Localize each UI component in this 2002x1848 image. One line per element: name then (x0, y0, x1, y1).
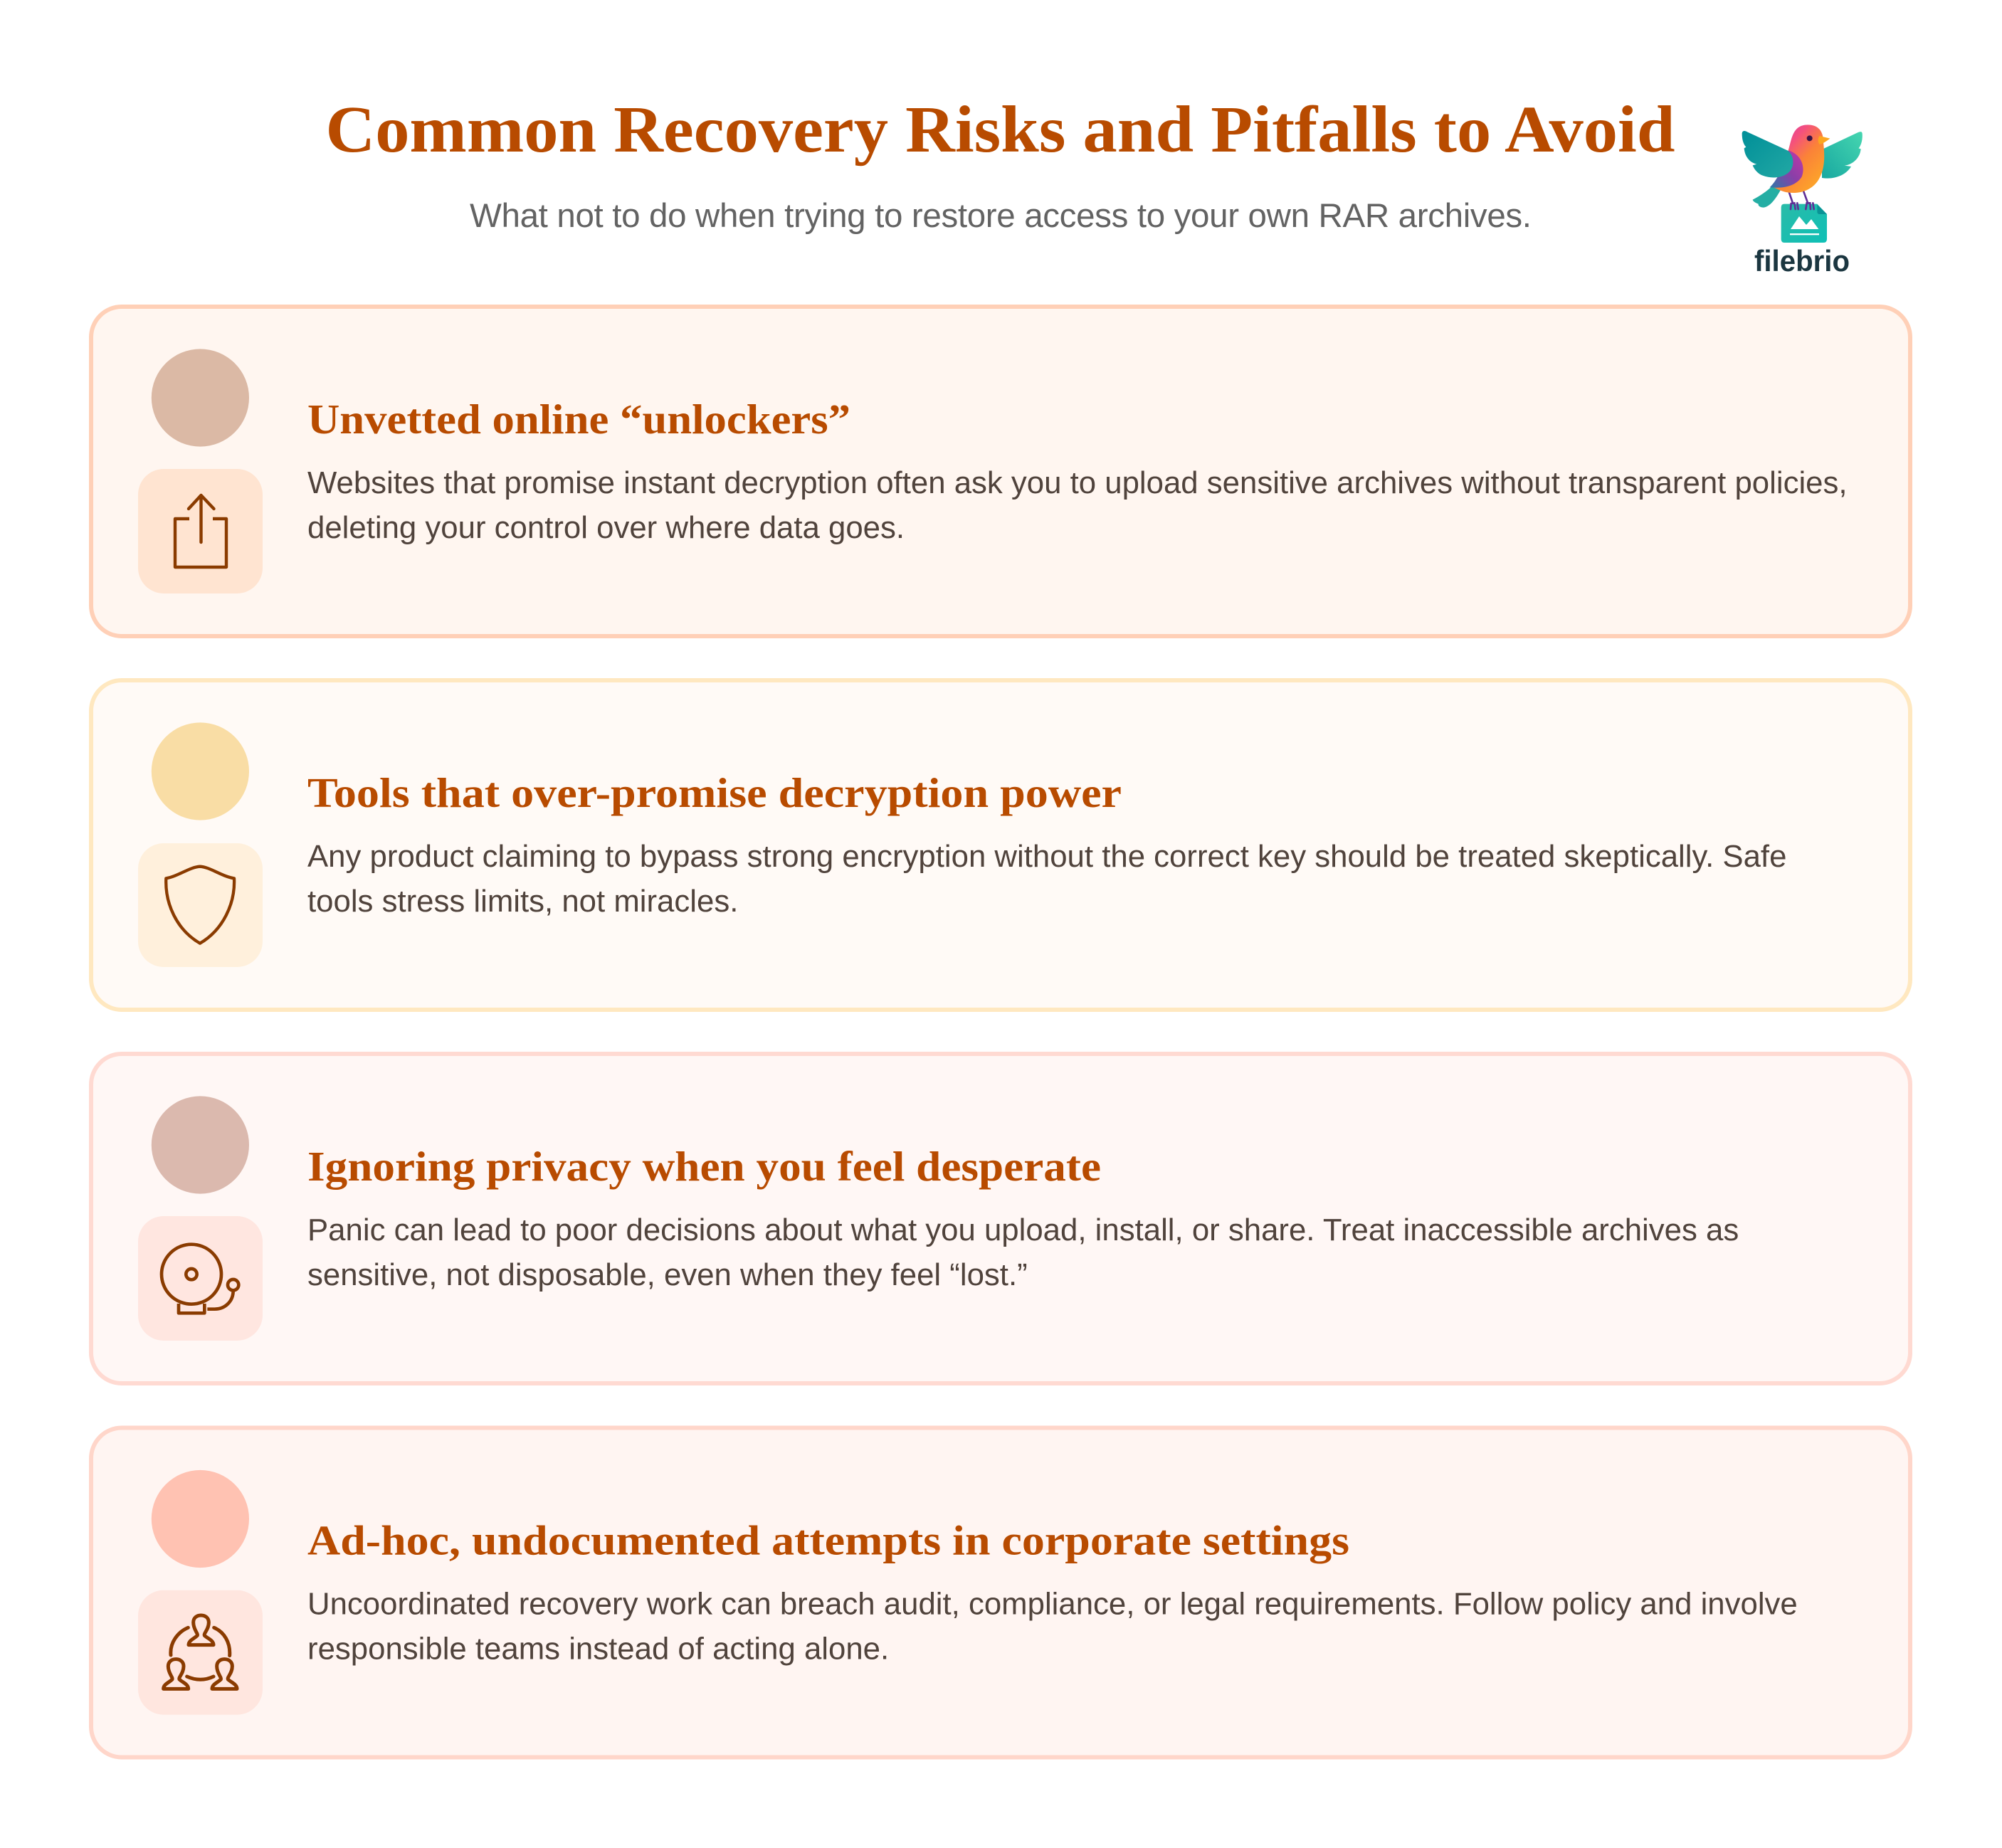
panel: tools that over-promise (91, 680, 1910, 1010)
number circle (152, 349, 249, 447)
body (1774, 125, 1824, 193)
number circle (152, 1470, 249, 1568)
icon tile (138, 1216, 263, 1341)
heading: Ignoring privacy when you feel desperate (307, 1143, 1101, 1190)
body text: responsible teams instead of acting alone. (307, 1631, 889, 1667)
icon: team (164, 1615, 237, 1689)
panel: ad-hoc attempts (91, 1427, 1910, 1758)
heading: Ad-hoc, undocumented attempts in corporate settings (307, 1517, 1349, 1564)
icon: shield (166, 867, 234, 944)
right wing (1822, 132, 1863, 179)
heading: Tools that over-promise decryption power (307, 769, 1122, 816)
body text: Panic can lead to poor decisions about what you upload, install, or share. Treat inaccessible archives as (307, 1213, 1739, 1247)
number circle (152, 1096, 249, 1194)
body text: tools stress limits, not miracles. (307, 884, 738, 919)
subtitle: What not to do when trying to restore access to your own RAR archives. (470, 197, 1532, 235)
file line (1790, 233, 1819, 235)
panel: unvetted online unlockers (91, 307, 1910, 636)
number circle (152, 722, 249, 820)
beak (1818, 136, 1830, 144)
file fold (1817, 204, 1827, 214)
heading: Unvetted online “unlockers” (307, 396, 850, 443)
icon: upload (175, 495, 226, 567)
eye (1807, 135, 1813, 141)
card background (91, 1427, 1910, 1758)
title: Common Recovery Risks and Pitfalls to Avoid (326, 93, 1675, 167)
logo: filebrio bird (1742, 125, 1863, 243)
icon tile (138, 469, 263, 593)
file (1781, 204, 1827, 243)
card background (91, 1054, 1910, 1383)
inner wing band (1770, 151, 1803, 188)
body text: Websites that promise instant decryption often ask you to upload sensitive archives without transparent policies, (307, 465, 1848, 500)
body text: deleting your control over where data goes. (307, 510, 905, 545)
body text: sensitive, not disposable, even when they feel “lost.” (307, 1257, 1028, 1292)
toes on file (1791, 203, 1814, 209)
icon tile (138, 1590, 263, 1715)
logo wordmark: filebrio (1754, 244, 1850, 278)
panel: ignoring privacy (91, 1054, 1910, 1383)
left wing (1742, 131, 1793, 177)
icon tile (138, 843, 263, 967)
card background (91, 680, 1910, 1010)
body text: Any product claiming to bypass strong encryption without the correct key should be treated skeptically. Safe (307, 839, 1786, 874)
icon: alarm bell (162, 1245, 238, 1313)
legs (1789, 191, 1808, 205)
body text: Uncoordinated recovery work can breach audit, compliance, or legal requirements. Follow policy and involve (307, 1587, 1798, 1621)
tail (1753, 185, 1781, 208)
card background (91, 307, 1910, 636)
mountains (1791, 216, 1818, 229)
